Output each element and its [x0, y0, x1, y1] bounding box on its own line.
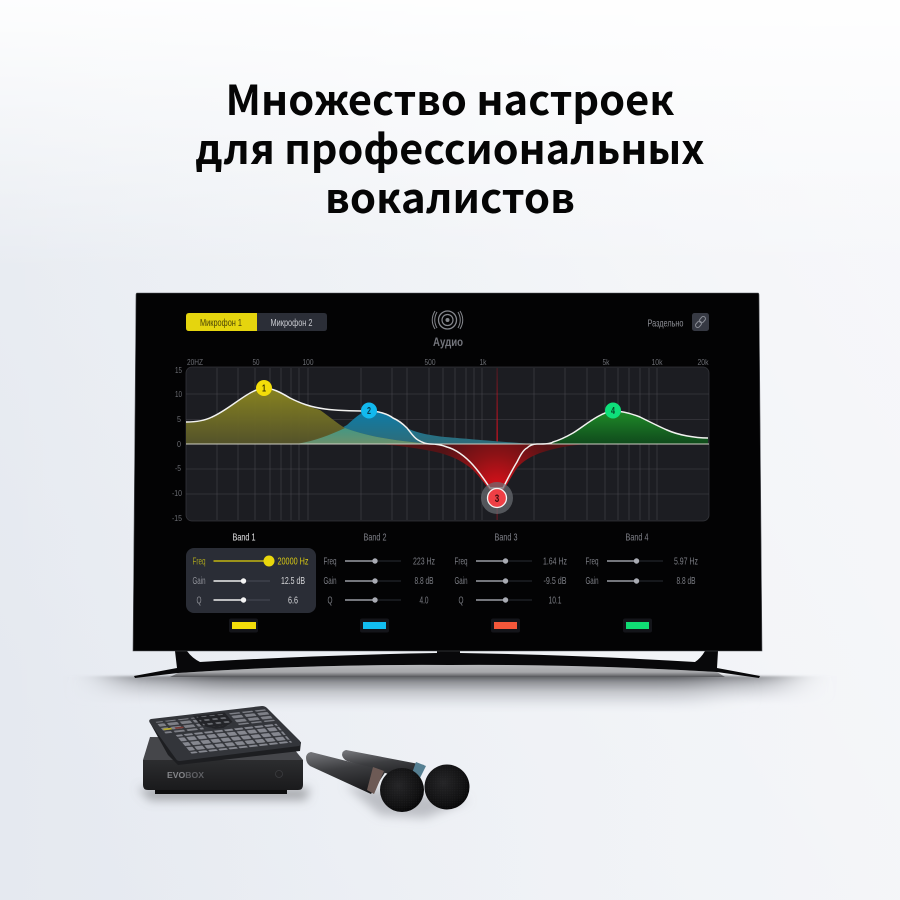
- title: для профессиональных: [196, 116, 704, 176]
- tab: Микрофон 2: [257, 313, 327, 331]
- box logo: EVOBOX: [167, 771, 205, 780]
- panel: band 3: 10.1: [548, 594, 562, 606]
- gain axis labels: 10: [175, 390, 182, 399]
- remote keys: [154, 708, 293, 755]
- panel: band 4: [586, 556, 698, 587]
- panel: band 1: Q: [196, 594, 202, 606]
- TV: [133, 293, 762, 651]
- tab: Микрофон 2: Микрофон 2: [270, 317, 313, 329]
- gain axis labels: -15: [172, 514, 182, 523]
- panel: band 1: Gain: [192, 575, 206, 587]
- gain axis labels: -10: [172, 489, 182, 498]
- upper left keys: [156, 718, 204, 734]
- panel: band 2: Freq: [324, 556, 337, 568]
- box top: [143, 737, 303, 760]
- panel: band 1: 6.6: [288, 594, 298, 606]
- frequency axis labels: 50: [252, 358, 260, 367]
- panel: band 1: Freq: [192, 556, 206, 568]
- panel: band 3: -9.5 dB: [544, 575, 566, 587]
- navigation pad: [193, 712, 236, 730]
- mic 1 head: [380, 768, 424, 812]
- panel: band 4: Gain: [586, 575, 599, 587]
- microphone 2: [342, 750, 470, 810]
- panel: band 1: 12.5 dB: [281, 575, 305, 587]
- title: [196, 67, 704, 225]
- remote side: [149, 721, 301, 765]
- band 2 fill: [290, 411, 533, 444]
- band 3 fill: [380, 444, 590, 498]
- panel: band 3: [454, 556, 567, 606]
- mic 2 head: [424, 764, 470, 810]
- mic 1 ring: [367, 767, 384, 794]
- panel: band 4: 5.97 Hz: [674, 556, 698, 568]
- box power button: [276, 770, 282, 778]
- title: вокалистов: [325, 165, 575, 225]
- panel: band 3: Gain: [454, 575, 468, 587]
- frequency axis labels: 10k: [652, 358, 663, 367]
- panel: band 4: Freq: [586, 556, 599, 568]
- remote body: [149, 706, 301, 761]
- panel: band 3: Q: [458, 594, 464, 606]
- label: Раздельно: Раздельно: [648, 318, 684, 330]
- band 4 fill: [537, 411, 708, 444]
- tab: Микрофон 1: [186, 313, 257, 331]
- mic 2 ring: [411, 762, 426, 780]
- panel: band 2: 4.0: [420, 594, 429, 606]
- TV stand: [134, 651, 760, 678]
- yellow key: [163, 728, 172, 730]
- colour swatches: [229, 618, 652, 632]
- band headings: Band 2: [364, 532, 387, 544]
- overlap tint: [296, 428, 430, 444]
- panel: band 2: 223 Hz: [413, 556, 435, 568]
- device shadows: [138, 785, 470, 818]
- band headings: [232, 532, 649, 544]
- TV body: [133, 293, 762, 651]
- mic 2 body: [342, 750, 424, 782]
- box front: [143, 760, 303, 790]
- floor shadow under TV: [115, 665, 785, 713]
- response curve: [186, 388, 708, 488]
- EQ chart: [186, 367, 709, 521]
- microphone 1: [306, 752, 424, 812]
- gain axis labels: 0: [177, 440, 181, 449]
- panel: band 3: 1.64 Hz: [543, 556, 567, 568]
- frequency axis labels: 1k: [480, 358, 487, 367]
- panel: band 1: 20000 Hz: [278, 556, 308, 568]
- frequency axis labels: 100: [302, 358, 314, 367]
- band 1 fill: [186, 388, 430, 444]
- marker 4: [605, 402, 621, 418]
- remote control: [149, 706, 301, 765]
- chart panel: [186, 367, 709, 521]
- panel: band 2: Gain: [324, 575, 337, 587]
- media box: [143, 737, 303, 794]
- marker 3: [481, 482, 513, 514]
- heading: Аудио: Аудио: [433, 337, 463, 349]
- frequency axis labels: 20HZ: [187, 358, 203, 367]
- marker 2: [361, 402, 377, 418]
- tab: Микрофон 1: Микрофон 1: [200, 317, 242, 329]
- icon: audio: [432, 311, 463, 329]
- frequency axis labels: [187, 358, 709, 367]
- panel: band 1: [186, 548, 316, 613]
- band headings: Band 1: [232, 532, 256, 544]
- marker 1: 1: [262, 384, 266, 394]
- gain axis labels: 15: [175, 366, 182, 375]
- panel: band 3: Freq: [454, 556, 468, 568]
- red marker line: [496, 368, 498, 520]
- band headings: Band 3: [494, 532, 518, 544]
- title: Множество настроек: [226, 67, 675, 127]
- panel: band 2: [324, 556, 435, 606]
- marker 2: 2: [367, 406, 371, 417]
- frequency axis labels: 500: [424, 358, 436, 367]
- upper right keys: [227, 709, 275, 725]
- zero line: [186, 443, 709, 445]
- icon: link button: [692, 313, 709, 331]
- panel: band 2: 8.8 dB: [414, 575, 434, 587]
- lower keypad: [176, 724, 292, 754]
- red key: [174, 726, 184, 729]
- grid: [186, 368, 709, 520]
- panel: band 4: 8.8 dB: [676, 575, 696, 587]
- gain axis labels: 5: [177, 415, 181, 424]
- mic 1 body: [306, 752, 386, 794]
- gain axis labels: -5: [175, 464, 181, 473]
- box base: [155, 790, 287, 794]
- frequency axis labels: 5k: [602, 358, 610, 367]
- band headings: Band 4: [626, 532, 649, 544]
- marker 3: 3: [495, 493, 499, 505]
- gain axis labels: [172, 366, 182, 523]
- marker 1: [256, 380, 272, 396]
- panel: band 2: Q: [328, 594, 332, 606]
- frequency axis labels: 20k: [698, 358, 709, 367]
- marker 4: 4: [611, 406, 615, 417]
